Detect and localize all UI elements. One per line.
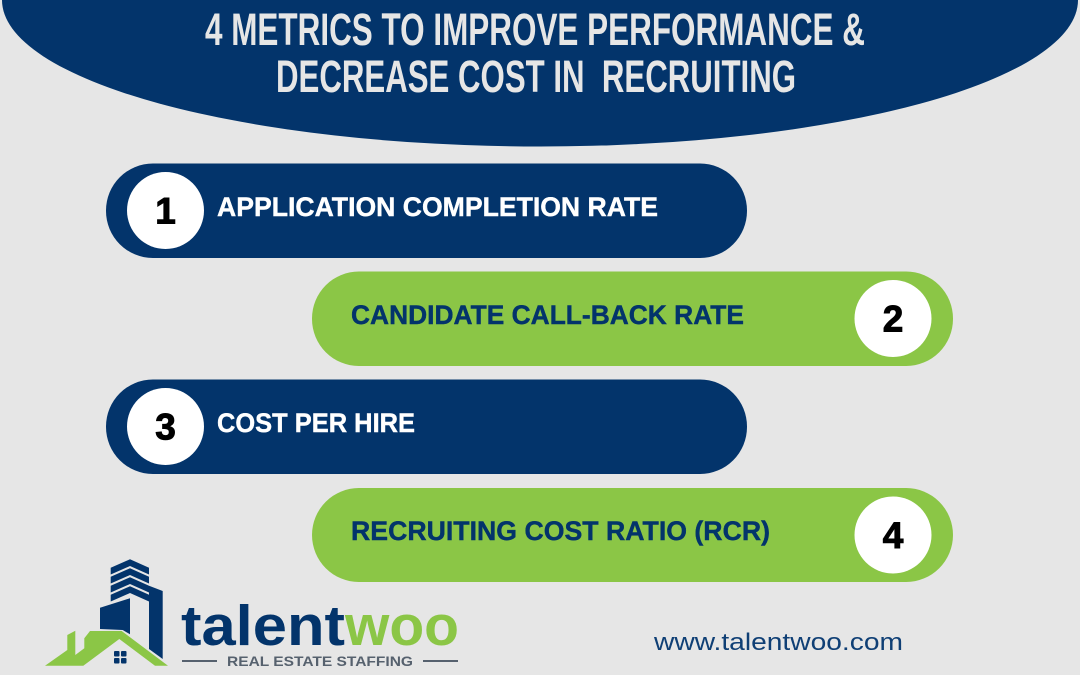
header banner [2, 0, 1078, 146]
icon: window [114, 651, 126, 664]
wordmark: talent [181, 594, 345, 658]
metric 1 pill [106, 164, 747, 258]
metric 3 pill [106, 380, 747, 474]
metric 1 pill: 1 [155, 190, 176, 232]
title: DECREASE COST IN RECRUITING [276, 51, 796, 102]
tagline: REAL ESTATE STAFFING [227, 653, 413, 669]
wordmark [181, 594, 459, 658]
metric 4 pill: RECRUITING COST RATIO (RCR) [351, 516, 770, 546]
wordmark: woo [344, 594, 459, 658]
metric 1 pill: APPLICATION COMPLETION RATE [217, 192, 658, 222]
website url: www.talentwoo.com [653, 629, 903, 656]
metric 3 pill: 3 [155, 406, 176, 448]
icon: building [100, 559, 163, 659]
metric 4 pill [312, 488, 953, 582]
logo: talentwoo [45, 559, 459, 669]
icon: house roof [45, 631, 168, 666]
metric 2 pill [312, 272, 953, 366]
metric 2 pill: CANDIDATE CALL-BACK RATE [351, 300, 744, 330]
title [205, 4, 865, 102]
metric 2 pill: 2 [883, 298, 903, 340]
metric 3 pill: COST PER HIRE [217, 408, 415, 438]
metric 4 pill: 4 [883, 515, 904, 556]
